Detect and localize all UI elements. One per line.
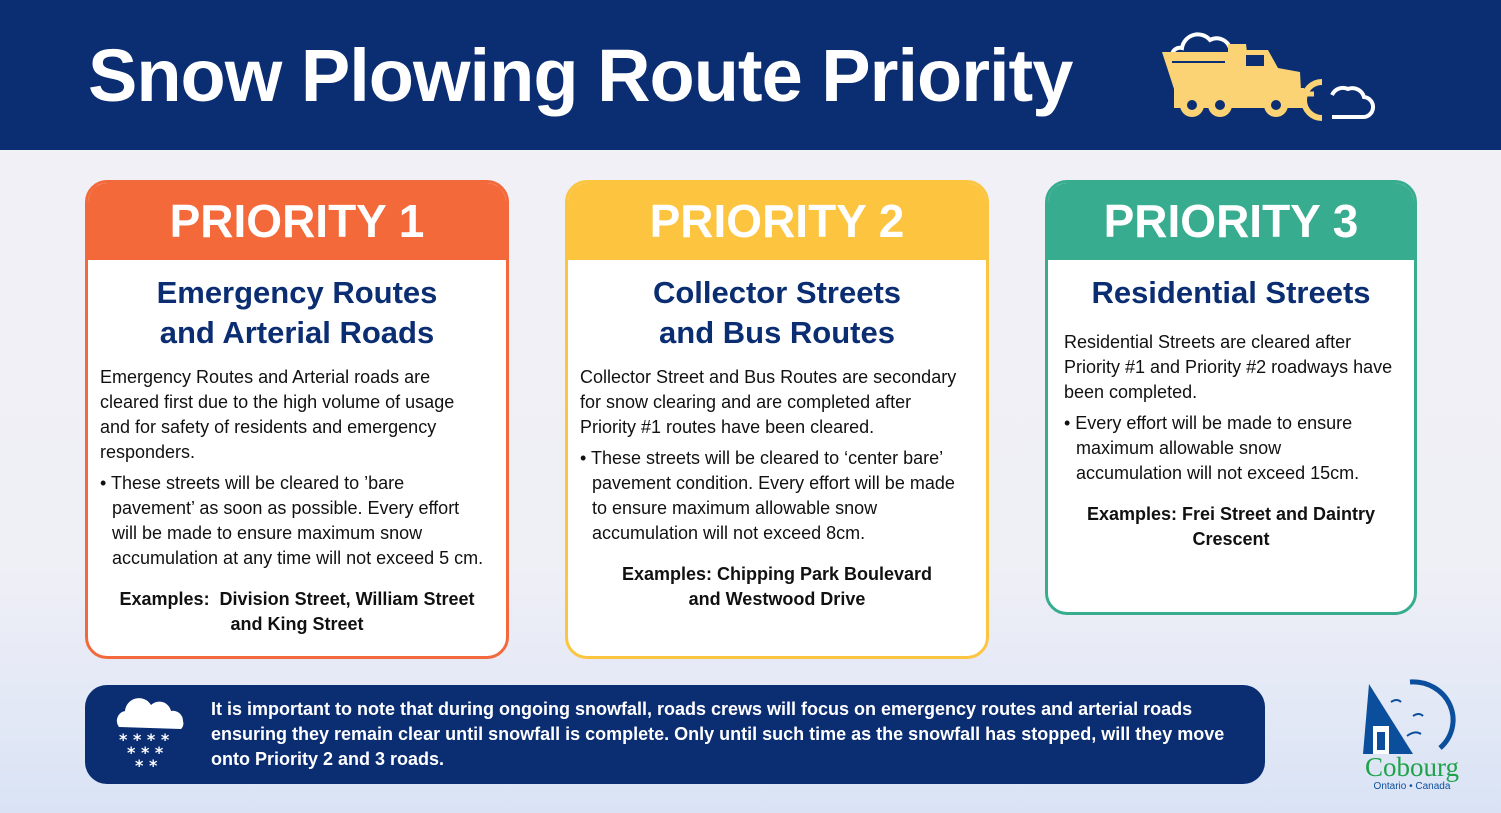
heading: Emergency Routes <box>157 275 437 310</box>
text block: • These streets will be cleared to ’bare <box>100 473 404 493</box>
text block: cleared first due to the high volume of usage <box>100 392 454 412</box>
logo: Cobourg: Cobourg <box>1365 752 1459 782</box>
text block: pavement’ as soon as possible. Every effort <box>112 498 459 518</box>
text block: • Every effort will be made to ensure <box>1064 413 1352 433</box>
text block: Collector Street and Bus Routes are secondary <box>580 367 956 387</box>
logo: Cobourg <box>1363 679 1459 792</box>
card header: priority 3 <box>1048 183 1414 260</box>
card header: priority 2: PRIORITY 2 <box>650 195 904 247</box>
examples: Examples: Division Street, William Street <box>120 589 474 609</box>
card header: priority 3: PRIORITY 3 <box>1104 195 1358 247</box>
icon: snow plow truck <box>1162 32 1376 121</box>
card header: priority 2 <box>568 183 986 260</box>
header banner <box>0 0 1501 150</box>
text block: Priority #1 and Priority #2 roadways have <box>1064 357 1392 377</box>
icon: snow cloud: * * * <box>127 743 164 762</box>
examples <box>120 589 474 634</box>
text block: • These streets will be cleared to ‘center bare’ <box>580 448 943 468</box>
note banner <box>85 685 1265 784</box>
panel: priority 2 <box>565 180 989 659</box>
card header: priority 1: PRIORITY 1 <box>170 195 424 247</box>
heading: and Arterial Roads <box>160 315 434 350</box>
icon: snow cloud: * * * * <box>119 730 170 749</box>
heading: and Bus Routes <box>659 315 895 350</box>
heading <box>157 275 437 350</box>
logo: Cobourg: Ontario • Canada <box>1374 781 1451 792</box>
text block: accumulation will not exceed 15cm. <box>1076 463 1359 483</box>
examples: Examples: Frei Street and Daintry <box>1087 504 1375 524</box>
text block <box>100 367 483 568</box>
text block: to ensure maximum allowable snow <box>592 498 877 518</box>
text block: and for safety of residents and emergency <box>100 417 436 437</box>
examples: and King Street <box>230 614 364 634</box>
title: Snow Plowing Route Priority <box>88 34 1072 117</box>
heading <box>653 275 901 350</box>
text block: for snow clearing and are completed after <box>580 392 911 412</box>
text block: accumulation at any time will not exceed 5 cm. <box>112 548 483 568</box>
icon: snow cloud <box>116 698 184 773</box>
text block: accumulation will not exceed 8cm. <box>592 523 865 543</box>
examples: and Westwood Drive <box>689 589 865 609</box>
text block <box>1064 332 1392 483</box>
note text: It is important to note that during ongoing snowfall, roads crews will focus on emergency routes and arterial roads <box>211 699 1192 719</box>
examples <box>622 564 932 609</box>
examples: Examples: Chipping Park Boulevard <box>622 564 932 584</box>
examples <box>1087 504 1375 549</box>
text block: Residential Streets are cleared after <box>1064 332 1351 352</box>
note text: ensuring they remain clear until snowfall is complete. Only until such time as the snowfall has stopped, will they move <box>211 724 1224 744</box>
heading: Collector Streets <box>653 275 901 310</box>
note text <box>211 699 1224 769</box>
heading: Residential Streets <box>1091 275 1371 310</box>
text block: responders. <box>100 442 195 462</box>
text block: maximum allowable snow <box>1076 438 1281 458</box>
panel: priority 1 <box>85 180 509 659</box>
text block: Emergency Routes and Arterial roads are <box>100 367 430 387</box>
text block <box>580 367 956 543</box>
panel: priority 3 <box>1045 180 1417 615</box>
card header: priority 1 <box>88 183 506 260</box>
examples: Crescent <box>1192 529 1270 549</box>
text block: Priority #1 routes have been cleared. <box>580 417 874 437</box>
text block: pavement condition. Every effort will be made <box>592 473 955 493</box>
note text: onto Priority 2 and 3 roads. <box>211 749 444 769</box>
text block: will be made to ensure maximum snow <box>112 523 422 543</box>
text block: been completed. <box>1064 382 1197 402</box>
